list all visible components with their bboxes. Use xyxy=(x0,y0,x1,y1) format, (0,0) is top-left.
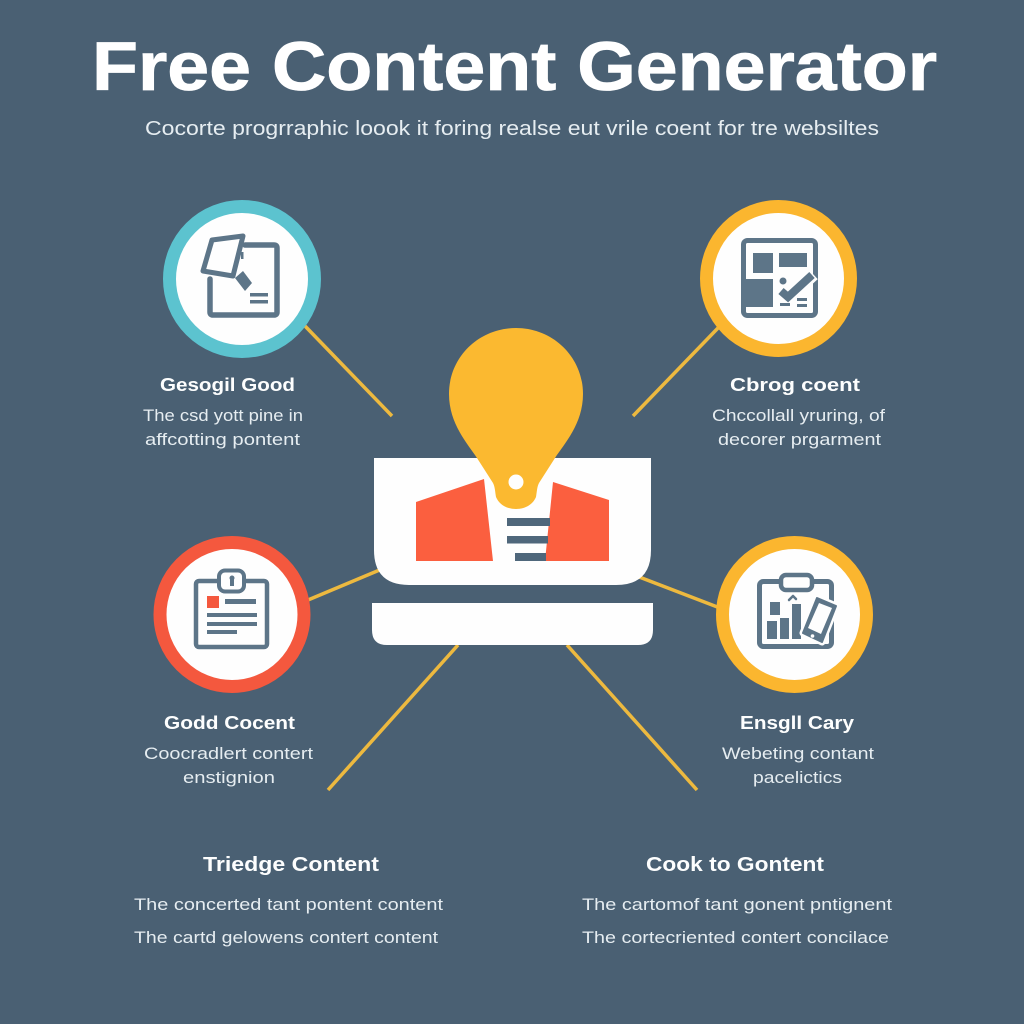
text block: bottom-right: The cortecriented contert concilace xyxy=(582,928,889,947)
icon: middle-right yellow circle with chart and phone xyxy=(722,542,866,686)
label: top-left: affcotting pontent xyxy=(145,430,300,449)
right red panel xyxy=(545,482,609,561)
label: middle-left: Godd Cocent xyxy=(164,712,295,733)
icon: top-left teal circle with tablet and document xyxy=(170,206,314,352)
text block: bottom-left xyxy=(134,854,443,947)
central illustration: laptop with light bulb xyxy=(372,328,653,645)
left red panel xyxy=(416,479,493,561)
connector lines xyxy=(305,326,720,790)
label: middle-right: pacelictics xyxy=(753,768,842,787)
icon: middle-left red circle with clipboard xyxy=(160,542,304,686)
icon: top-right yellow circle with layout and checkmark xyxy=(706,206,850,350)
laptop screen xyxy=(374,458,651,585)
subtitle: Cocorte progrraphic loook it foring realse eut vrile coent for tre websiltes xyxy=(145,118,879,140)
text block: bottom-left: The concerted tant pontent content xyxy=(134,895,443,914)
light bulb xyxy=(449,328,583,509)
text block: bottom-right: Cook to Gontent xyxy=(646,854,824,876)
label: middle-left: Coocradlert contert xyxy=(144,744,313,763)
label: middle-right: Ensgll Cary xyxy=(740,712,855,733)
label: top-right: Cbrog coent xyxy=(730,374,860,395)
label: top-right xyxy=(712,374,885,449)
text block: bottom-right: The cartomof tant gonent pntignent xyxy=(582,895,892,914)
label: top-left xyxy=(143,374,303,449)
label: middle-right xyxy=(722,712,874,787)
bulb hole xyxy=(508,474,524,490)
label: middle-left xyxy=(144,712,313,787)
label: top-right: Chccollall yruring, of xyxy=(712,406,885,425)
text block: bottom-left: The cartd gelowens contert content xyxy=(134,928,438,947)
label: middle-left: enstignion xyxy=(183,768,275,787)
text block: bottom-right xyxy=(582,854,892,947)
label: top-right: decorer prgarment xyxy=(718,430,881,449)
label: top-left: The csd yott pine in xyxy=(143,406,303,425)
label: top-left: Gesogil Good xyxy=(160,374,295,395)
laptop base xyxy=(372,603,653,645)
label: middle-right: Webeting contant xyxy=(722,744,874,763)
title: Free Content Generator xyxy=(92,28,937,105)
text block: bottom-left: Triedge Content xyxy=(203,854,379,876)
text stripes xyxy=(507,518,550,561)
